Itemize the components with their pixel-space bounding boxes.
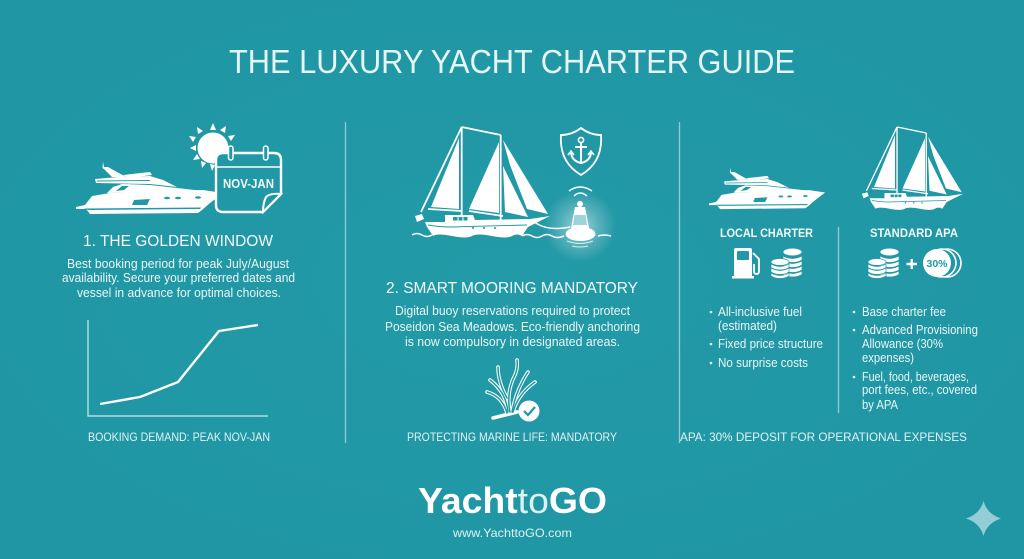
icon: yacht: [76, 162, 223, 214]
icon: coins right: [868, 248, 899, 278]
text block: booking period: availability. Secure your preferred dates and: [62, 271, 295, 285]
icon: 30% coin: 30%: [926, 259, 948, 270]
list: local charter: [710, 305, 823, 370]
list: standard apa: Allowance (30%: [862, 337, 943, 351]
list: standard apa: Advanced Provisioning: [862, 323, 978, 337]
icon: sailboat: [415, 127, 550, 238]
caption: apa deposit: APA: 30% DEPOSIT FOR OPERATIONAL EXPENSES: [680, 430, 967, 444]
list: local charter: All-inclusive fuel: [718, 305, 802, 319]
text block: booking period: vessel in advance for optimal choices.: [77, 286, 281, 300]
text block: buoy reservations: is now compulsory in designated areas.: [405, 335, 620, 349]
list: standard apa: Fuel, food, beverages,: [862, 370, 969, 384]
text block: buoy reservations: Digital buoy reservations required to protect: [395, 304, 631, 318]
logo: YachttoGO: YachttoGO: [418, 480, 607, 521]
text block: buoy reservations: [385, 304, 640, 349]
icon: anchor shield: [561, 128, 601, 175]
heading: standard apa: STANDARD APA: [870, 226, 958, 240]
heading: smart mooring: 2. SMART MOORING MANDATORY: [386, 280, 638, 297]
list: standard apa: expenses): [862, 351, 914, 365]
heading: local charter: LOCAL CHARTER: [720, 226, 813, 240]
caption: protecting marine life: PROTECTING MARINE LIFE: MANDATORY: [407, 430, 617, 444]
icon: waves and mooring line: [412, 220, 611, 238]
text block: buoy reservations: Poseidon Sea Meadows. Eco-friendly anchoring: [385, 320, 640, 334]
icon: calendar NOV-JAN: [216, 146, 281, 212]
text block: booking period: Best booking period for peak July/August: [67, 257, 290, 271]
list: local charter: No surprise costs: [718, 356, 808, 370]
icon: fuel pump: [732, 248, 759, 278]
icon: sun: [189, 123, 235, 171]
icon: coins left: [771, 248, 802, 278]
title: THE LUXURY YACHT CHARTER GUIDE: [229, 43, 795, 80]
website url: www.YachttoGO.com: [452, 526, 572, 540]
icon: sparkle: [966, 501, 1001, 536]
icon: plus: [906, 259, 917, 269]
caption: booking demand: BOOKING DEMAND: PEAK NOV-JAN: [88, 430, 270, 444]
icon: coral with check: [487, 360, 540, 422]
list: local charter: Fixed price structure: [718, 337, 823, 351]
text block: booking period: [62, 257, 295, 300]
icon: calendar NOV-JAN: NOV-JAN: [223, 177, 274, 191]
icon: small yacht: [709, 168, 825, 209]
icon: smart buoy: [544, 187, 616, 262]
list: standard apa: Base charter fee: [862, 305, 946, 319]
list: standard apa: [853, 305, 978, 412]
panel: smart mooring: [385, 127, 640, 444]
chart: booking demand line: [88, 320, 268, 416]
heading: the golden window: 1. THE GOLDEN WINDOW: [83, 233, 274, 250]
list: standard apa: port fees, etc., covered: [862, 383, 977, 397]
icon: small sailboat: [862, 127, 963, 210]
panel: the golden window: [62, 123, 295, 444]
panel: charter comparison: [680, 127, 978, 444]
list: local charter: (estimated): [718, 319, 777, 333]
list: standard apa: by APA: [862, 398, 899, 412]
icon: 30% coin: [923, 249, 961, 277]
